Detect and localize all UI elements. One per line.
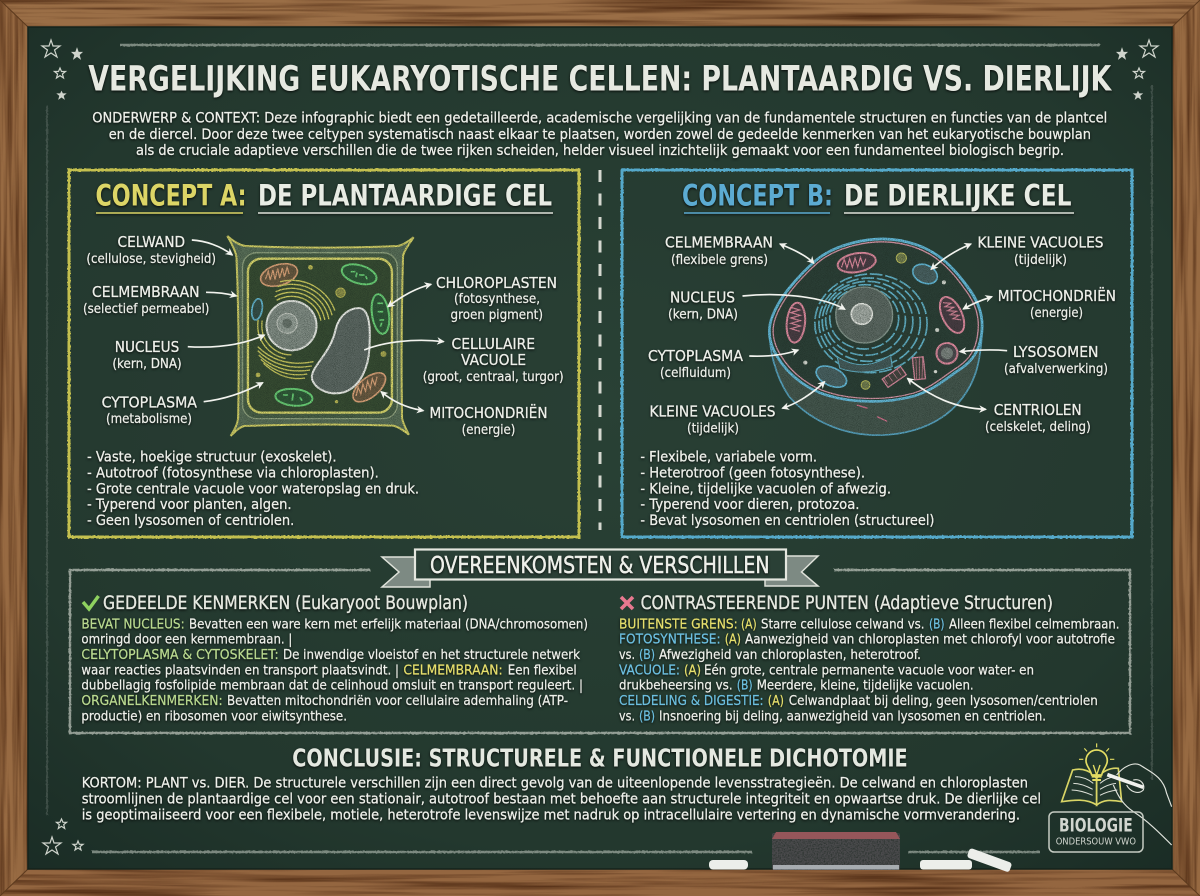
label: celmembraan (665, 234, 773, 268)
organelle: nucleus (267, 301, 317, 350)
decorative chalk stars top right (1118, 40, 1158, 98)
chalk pieces (709, 848, 1012, 873)
organelle: mitochondria (258, 260, 391, 407)
label: kleine vacuoles right: KLEINE VACUOLES (978, 234, 1104, 252)
text block differences: Insnoering bij deling, aanwezigheid van lysosomen en centriolen. (659, 708, 1046, 724)
label: kleine vacuoles right: (tijdelijk) (1014, 252, 1067, 268)
text block differences: Celwandplaat bij deling, geen lysosomen/centriolen (789, 693, 1098, 709)
text block differences: FOTOSYNTHESE: (619, 632, 721, 648)
label: lysosomen: LYSOSOMEN (1013, 343, 1098, 361)
text block shared features: ORGANELKENMERKEN: (81, 693, 223, 709)
text block shared features: BEVAT NUCLEUS: (81, 616, 185, 632)
label: celmembraan: CELMEMBRAAN (665, 234, 773, 252)
label: cytoplasma (648, 347, 743, 381)
text block differences: CELDELING & DIGESTIE: (619, 693, 764, 709)
organelle: chloroplasts (275, 261, 392, 407)
label: cellulaire vacuole: CELLULAIRE (452, 335, 535, 353)
heading concept A (96, 179, 553, 214)
label: kleine vacuoles left: (tijdelijk) (687, 421, 739, 437)
label: cellulaire vacuole: (groot, centraal, turgor) (423, 369, 564, 385)
label: celmembraan: CELMEMBRAAN (92, 283, 200, 301)
column: contrasterende punten (619, 593, 1120, 724)
label: lysosomen (1004, 343, 1108, 377)
text block shared features: waar reacties plaatsvinden en transport plaatsvindt. | (81, 662, 399, 678)
arrow: kleine vacuoles right (931, 244, 971, 269)
arrow: centriolen (907, 378, 986, 409)
organelle: endoplasmic reticulum (815, 274, 927, 373)
list: plant cell characteristics (87, 450, 419, 529)
text block shared features: Bevatten mitochondriën voor cellulaire ademhaling (ATP- (227, 693, 568, 709)
panel: concept B animal cell (622, 170, 1132, 537)
text block shared features: dubbellagig fosfolipide membraan dat de celinhoud omsluit en transport reguleert. | (81, 678, 583, 694)
organelle: lysosome (937, 343, 957, 364)
text block differences: (A) (768, 693, 784, 709)
panel: overeenkomsten en verschillen (70, 550, 1130, 733)
text block differences: (B) (737, 678, 753, 694)
label: chloroplasten: groen pigment) (450, 307, 543, 323)
label: nucleus: NUCLEUS (115, 338, 179, 356)
list: plant cell characteristics: - Typerend voor planten, algen. (87, 497, 292, 513)
text block differences: vs. (619, 708, 635, 724)
label: kleine vacuoles left: KLEINE VACUOLES (650, 403, 776, 421)
text block differences: Eén grote, centrale permanente vacuole voor water- en (704, 662, 1034, 678)
arrow: chloroplasten (388, 284, 431, 307)
label: celwand (86, 233, 216, 267)
organelle: small vacuoles (813, 260, 941, 392)
label: nucleus (668, 289, 738, 323)
plant cell diagram (227, 236, 414, 436)
text block shared features: CELYTOPLASMA & CYTOSKELET: (81, 647, 279, 663)
text block shared features: Een flexibel (508, 662, 577, 678)
text block differences: (B) (639, 708, 655, 724)
label: mitochondrien: (energie) (462, 422, 515, 438)
list: animal cell characteristics: - Heterotroof (geen fotosynthese). (640, 466, 865, 482)
text block differences: Aanwezigheid van chloroplasten met chlorofyl voor autotrofie (745, 632, 1115, 648)
text block shared features: Bevatten een ware kern met erfelijk materiaal (DNA/chromosomen) (189, 616, 588, 632)
text block differences: VACUOLE: (619, 662, 680, 678)
context text block: ONDERWERP & CONTEXT: Deze infographic biedt een gedetailleerde, academische vergelijking van de fundamentele structuren en functies van de plantcel (92, 111, 1107, 127)
label: mitochondrien: MITOCHONDRIËN (998, 286, 1116, 305)
list: animal cell characteristics: - Flexibele, variabele vorm. (640, 450, 817, 466)
context text block: als de cruciale adaptieve verschillen die de twee rijken scheiden, helder visueel inzichtelijk gemaakt voor een fundamenteel biologisch begrip. (136, 143, 1064, 159)
logo: biologie: BIOLOGIE (1059, 816, 1133, 837)
text block differences: (B) (929, 616, 944, 632)
text block differences: drukbeheersing vs. (619, 678, 733, 694)
label: kleine vacuoles left (650, 403, 776, 437)
heading gedeelde kenmerken: GEDEELDE KENMERKEN (Eukaryoot Bouwplan) (103, 593, 468, 614)
arrow: kleine vacuoles left (782, 382, 825, 408)
label: nucleus: (kern, DNA) (112, 356, 182, 372)
label: cytoplasma: (celfluidum) (660, 365, 731, 381)
heading concept A: CONCEPT A: (96, 179, 246, 214)
arrow: mitochondrien (381, 392, 423, 411)
label: chloroplasten: (fotosynthese, (454, 291, 540, 307)
icon: cross mark (621, 597, 633, 609)
label: nucleus: NUCLEUS (670, 289, 735, 307)
icon: check mark (83, 596, 98, 609)
label: mitochondrien: (energie) (1030, 305, 1083, 321)
chalk eraser (772, 832, 900, 870)
text block shared features (81, 616, 588, 724)
conclusion heading: CONCLUSIE: STRUCTURELE & FUNCTIONELE DICHOTOMIE (292, 744, 908, 773)
organelle: nucleus (836, 287, 893, 343)
arrow: lysosomen (960, 350, 1007, 352)
text block differences: (A) (741, 616, 757, 632)
heading concept A: DE PLANTAARDIGE CEL (258, 179, 552, 214)
heading concept B: CONCEPT B: (682, 179, 833, 214)
label: kleine vacuoles right (978, 234, 1104, 268)
heading concept B (682, 179, 1074, 214)
label: cytoplasma: CYTOPLASMA (648, 347, 743, 365)
logo: biologie (1049, 743, 1172, 852)
list: animal cell characteristics: - Typerend voor dieren, protozoa. (640, 497, 860, 513)
label: mitochondrien (430, 403, 548, 438)
label: celmembraan (83, 283, 209, 317)
arrow: cytoplasma (749, 350, 798, 356)
heading concept B: DE DIERLIJKE CEL (844, 179, 1072, 214)
organelle: central vacuole (312, 308, 370, 393)
label: celmembraan: (selectief permeabel) (83, 301, 209, 317)
text block differences: BUITENSTE GRENS: (619, 616, 738, 632)
label: chloroplasten (436, 274, 557, 323)
conclusion text block: is geoptimaiiseerd voor een flexibele, motiele, heterotrofe levenswijze met nadruk op intracellulaire vertering en dynamische vormverandering. (82, 808, 1020, 824)
text block differences: (A) (725, 632, 741, 648)
conclusion text block (82, 776, 1041, 824)
banner: OVEREENKOMSTEN & VERSCHILLEN (430, 553, 770, 579)
arrow: cytoplasma (204, 383, 263, 402)
label: nucleus (112, 338, 182, 372)
context text block (92, 111, 1107, 159)
list: plant cell characteristics: - Vaste, hoekige structuur (exoskelet). (87, 450, 336, 466)
label: centriolen: CENTRIOLEN (994, 401, 1082, 419)
organelle: mitochondria (785, 250, 969, 343)
list: plant cell characteristics: - Autotroof (fotosynthese via chloroplasten). (87, 466, 379, 482)
list: plant cell characteristics: - Grote centrale vacuole voor wateropslag en druk. (87, 481, 419, 497)
label: cytoplasma: CYTOPLASMA (102, 394, 197, 412)
text block differences: Alleen flexibel celmembraan. (949, 616, 1120, 632)
text block differences: (A) (684, 662, 701, 678)
text block shared features: omringd door een kernmembraan. | (81, 632, 292, 648)
text block differences: Afwezigheid van chloroplasten, heterotroof. (659, 647, 921, 663)
context text block: en de diercel. Door deze twee celtypen systematisch naast elkaar te plaatsen, worden zowel de gedeelde kenmerken van het eukaryotische bouwplan (109, 127, 1091, 143)
label: lysosomen: (afvalverwerking) (1004, 361, 1108, 377)
list: animal cell characteristics (640, 450, 934, 529)
label: celwand: (cellulose, stevigheid) (86, 251, 216, 267)
logo: biologie: ONDERSOUW VWO (1056, 836, 1136, 847)
decorative chalk stars bottom left (43, 819, 83, 854)
label: cytoplasma (102, 394, 197, 427)
label: mitochondrien (998, 286, 1116, 321)
conclusion text block: KORTOM: PLANT vs. DIER. De structurele verschillen zijn een direct gevolg van de uiteenlopende levensstrategieën. De celwand en chloroplasten (82, 776, 1028, 792)
text block shared features: productie) en ribosomen voor eiwitsynthese. (81, 708, 347, 724)
decorative chalk stars top left (42, 40, 82, 98)
text block shared features: CELMEMBRAAN: (403, 662, 503, 678)
arrow: nucleus (188, 335, 264, 347)
text block differences (619, 616, 1120, 724)
arrow: mitochondrien (963, 297, 992, 309)
arrow: vacuole (364, 340, 444, 350)
label: cellulaire vacuole: VACUOLE (461, 351, 526, 369)
arrow: nucleus (742, 295, 845, 309)
text block differences: Starre cellulose celwand vs. (761, 616, 924, 632)
label: celwand: CELWAND (118, 233, 185, 251)
panel: concept A plant cell (69, 170, 579, 537)
text block differences: (B) (639, 647, 655, 663)
icon: book with light bulb and hand (1062, 743, 1172, 845)
label: celmembraan: (flexibele grens) (671, 252, 768, 268)
arrow: celmembraan (780, 244, 814, 263)
label: cellulaire vacuole (423, 335, 564, 385)
banner (382, 550, 818, 587)
label: chloroplasten: CHLOROPLASTEN (436, 274, 557, 292)
list: plant cell characteristics: - Geen lysosomen of centriolen. (87, 513, 294, 529)
label: centriolen: (celskelet, deling) (985, 419, 1091, 435)
arrow: celmembraan (206, 292, 236, 296)
list: animal cell characteristics: - Bevat lysosomen en centriolen (structureel) (640, 513, 934, 529)
conclusion text block: stroomlijnen de plantaardige cel voor een stationair, autotroof bestaan met behoefte aan structurele integriteit en opwaartse druk. De dierlijke cel (82, 792, 1041, 808)
text block differences: Meerdere, kleine, tijdelijke vacuolen. (757, 678, 974, 694)
organelle: endoplasmic reticulum (246, 280, 337, 379)
text block shared features: De inwendige vloeistof en het structurele netwerk (283, 647, 580, 663)
label: centriolen (985, 401, 1091, 435)
label: mitochondrien: MITOCHONDRIËN (430, 403, 548, 422)
text block differences: vs. (619, 647, 635, 663)
organelle: centrioles (882, 357, 925, 387)
heading contrasterende punten: CONTRASTEERENDE PUNTEN (Adaptieve Structuren) (641, 593, 1053, 614)
label: nucleus: (kern, DNA) (668, 307, 738, 323)
label: cytoplasma: (metabolisme) (106, 411, 192, 427)
list: animal cell characteristics: - Kleine, tijdelijke vacuolen of afwezig. (640, 481, 891, 497)
column: gedeelde kenmerken (81, 593, 588, 724)
arrow: celwand (192, 240, 232, 255)
animal cell diagram (769, 239, 983, 435)
